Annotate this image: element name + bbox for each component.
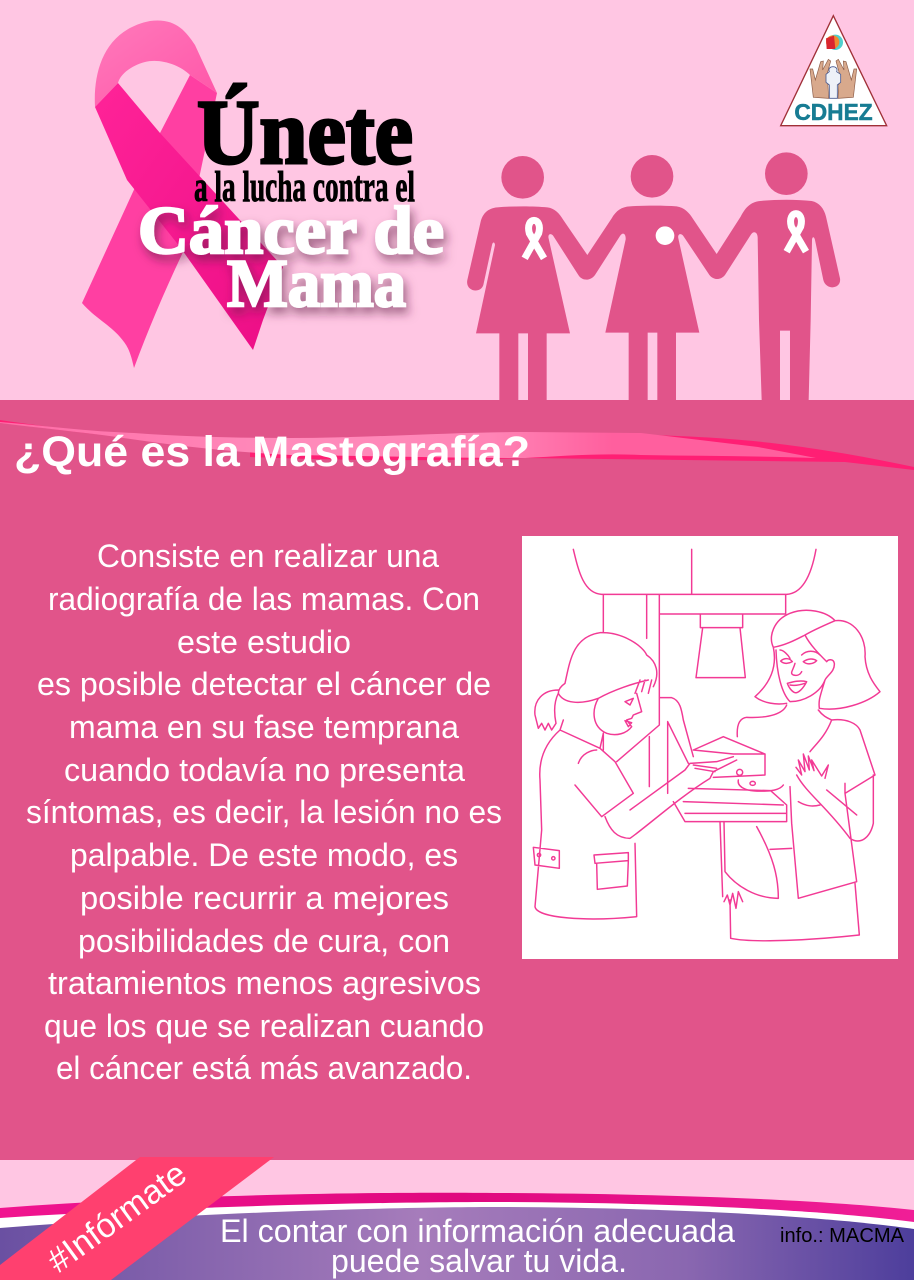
source credit: info.: MACMA: [780, 1225, 905, 1247]
text block: definition of mastography: palpable. De este modo, es: [70, 837, 458, 873]
text block: definition of mastography: posibilidades de cura, con: [78, 923, 450, 959]
banner: #Infórmate: #Infórmate: [40, 1155, 194, 1280]
text block: definition of mastography: que los que se realizan cuando: [44, 1008, 484, 1044]
text block: definition of mastography: radiografía de las mamas. Con: [48, 581, 480, 617]
illustration: mammogram line drawing: [522, 536, 898, 959]
title line: Mama: Mama: [227, 245, 406, 321]
icon: three people holding hands: [467, 152, 840, 400]
panel: ¿Qué es la Mastografía?: [0, 400, 914, 1160]
logo: CDHEZ: CDHEZ: [794, 99, 873, 125]
patient head: [755, 610, 880, 709]
title line: Únete: Únete: [197, 81, 413, 183]
heading: ¿Qué es la Mastografía?: ¿Qué es la Mastografía?: [14, 428, 530, 476]
footer message: puede salvar tu vida.: [331, 1243, 627, 1279]
title line: Cáncer de: Cáncer de: [138, 192, 444, 268]
icon: ribbon on first figure: [525, 220, 544, 258]
icon: ribbon on third figure: [787, 214, 806, 252]
footer message: [220, 1213, 735, 1279]
text block: definition of mastography: [26, 538, 502, 1086]
technician: [533, 633, 743, 919]
title: Únete a la lucha contra el Cáncer de Mama: [138, 81, 444, 321]
icon: white dot on second figure: [656, 226, 674, 245]
text block: definition of mastography: es posible detectar el cáncer de: [37, 666, 491, 702]
icon: pink ribbon: [82, 21, 283, 368]
title line: a la lucha contra el: a la lucha contra el: [194, 164, 415, 211]
banner: #Infórmate: [0, 1155, 274, 1280]
decorative swoosh behind heading: [0, 420, 914, 470]
text block: definition of mastography: síntomas, es decir, la lesión no es: [26, 794, 502, 830]
footer: purple wave band: [0, 1193, 914, 1280]
footer message: El contar con información adecuada: [220, 1213, 735, 1249]
text block: definition of mastography: mama en su fase temprana: [69, 709, 459, 745]
text block: definition of mastography: tratamientos menos agresivos: [48, 965, 481, 1001]
text block: definition of mastography: el cáncer está más avanzado.: [56, 1050, 472, 1086]
text block: definition of mastography: Consiste en realizar una: [97, 538, 439, 574]
logo: CDHEZ: [781, 16, 887, 126]
patient body: [720, 705, 875, 941]
machine: [573, 549, 816, 822]
text block: definition of mastography: este estudio: [177, 624, 351, 660]
text block: definition of mastography: posible recurrir a mejores: [80, 880, 449, 916]
text block: definition of mastography: cuando todavía no presenta: [64, 752, 465, 788]
